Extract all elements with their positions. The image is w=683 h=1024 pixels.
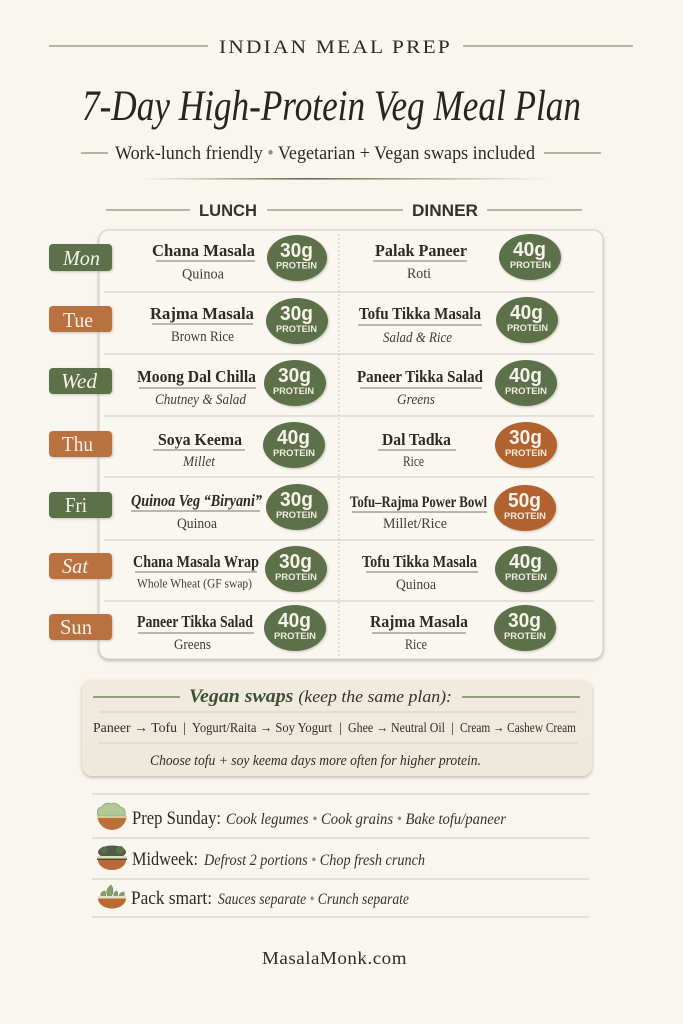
day tag: Wed: Wed [61, 369, 98, 393]
day tag: Thu: Thu [62, 432, 93, 456]
swaps list: | [339, 721, 342, 736]
protein badge: 40g [496, 297, 558, 343]
tip: pack smart: Pack smart: [131, 888, 212, 909]
protein badge: 30g: 30g [508, 610, 541, 632]
vegan swaps heading: Vegan swaps (keep the same plan): [189, 686, 452, 707]
header: Indian Meal Prep: INDIAN MEAL PREP [219, 37, 452, 58]
Wed dinner: Paneer Tikka Salad [357, 367, 483, 386]
Tue dinner: Salad & Rice [383, 330, 452, 346]
protein badge: 40g [495, 360, 557, 406]
subtitle: Work-lunch friendly • Vegetarian + Vegan swaps included [115, 143, 535, 164]
heading: dinner: DINNER [412, 202, 478, 220]
tip: prep Sunday: Cook legumes • Cook grains • Bake tofu/paneer [226, 811, 507, 828]
Wed dinner: Greens [397, 392, 435, 408]
icon: bowl with dark greens [97, 846, 127, 870]
Tue dinner: Tofu Tikka Masala [359, 304, 481, 323]
protein badge: 30g [494, 605, 556, 651]
tip: midweek: Defrost 2 portions • Chop fresh crunch [203, 852, 425, 869]
protein badge: 40g: PROTEIN [510, 260, 551, 270]
swaps list: Ghee → Neutral Oil [348, 721, 445, 736]
swaps list [93, 721, 576, 736]
protein badge: 50g orange: 50g [508, 490, 541, 512]
protein badge: 40g: 40g [509, 365, 542, 387]
Sun lunch: Paneer Tikka Salad [137, 612, 253, 631]
protein badge: 30g: PROTEIN [276, 260, 317, 270]
protein badge: 40g [495, 546, 557, 592]
panel: weekly meal table [49, 230, 603, 659]
Thu dinner [378, 430, 456, 470]
Sun dinner [370, 612, 468, 653]
protein badge: 40g: 40g [510, 302, 543, 324]
Tue dinner [358, 304, 482, 346]
day tag: Mon [49, 244, 112, 271]
protein badge: 30g [264, 360, 326, 406]
Sat lunch: Chana Masala Wrap [133, 552, 259, 571]
protein badge: 30g: PROTEIN [273, 386, 314, 396]
Mon lunch: Quinoa [182, 266, 225, 282]
protein badge: 30g [266, 484, 328, 530]
heading: lunch: LUNCH [199, 202, 257, 220]
protein badge: 30g: 30g [280, 240, 313, 262]
panel: vegan swaps [82, 680, 592, 776]
Fri dinner [350, 494, 488, 532]
protein badge: 30g [267, 235, 327, 281]
icon: bowl with light greens [97, 803, 126, 830]
title: 7-Day High-Protein Veg Meal Plan [82, 83, 581, 130]
column headings [106, 202, 582, 220]
protein badge: 40g: PROTEIN [274, 631, 316, 641]
Fri lunch: Quinoa Veg “Biryani” [131, 491, 262, 510]
day tag: Sun [49, 614, 112, 640]
Thu dinner: Dal Tadka [382, 430, 451, 449]
tip: Choose tofu + soy keema days more often for higher protein. [150, 753, 481, 769]
tip: midweek: Midweek: [132, 849, 198, 870]
Thu lunch: Millet [182, 454, 216, 470]
protein badge: 40g: 40g [278, 610, 311, 632]
protein badge: 40g: PROTEIN [273, 448, 315, 458]
Fri lunch [131, 491, 262, 532]
Sun lunch: Greens [174, 637, 211, 653]
tip: pack smart [131, 888, 409, 909]
protein badge: 30g: 30g [278, 365, 311, 387]
Sat lunch: Whole Wheat (GF swap) [137, 576, 252, 590]
Fri dinner: Millet/Rice [383, 516, 447, 532]
green divider [142, 178, 550, 180]
protein badge: 40g: 40g [509, 551, 542, 573]
protein badge: 30g [266, 298, 328, 344]
swaps list: Yogurt/Raita → Soy Yogurt [192, 721, 332, 736]
day tag: Sat: Sat [62, 554, 89, 578]
Mon lunch [152, 241, 255, 282]
protein badge: 40g [264, 605, 326, 651]
protein badge: 30g: 30g [280, 489, 313, 511]
protein badge: 40g: PROTEIN [507, 323, 548, 333]
protein badge: 30g: PROTEIN [276, 510, 317, 520]
protein badge: 50g orange: PROTEIN [504, 511, 546, 521]
swaps list: | [183, 721, 186, 736]
Thu lunch [153, 430, 245, 470]
protein badge: 40g: 40g [513, 239, 546, 261]
protein badge: 30g orange: PROTEIN [505, 448, 547, 458]
protein badge: 30g orange [495, 422, 557, 468]
Wed dinner [357, 367, 483, 408]
protein badge: 30g: PROTEIN [504, 631, 546, 641]
protein badge: 40g [263, 422, 325, 468]
Wed lunch: Chutney & Salad [155, 392, 247, 408]
Sat dinner [362, 552, 478, 593]
day tag: Thu [49, 431, 112, 457]
Mon dinner [373, 241, 467, 282]
Tue lunch [150, 304, 254, 345]
protein badge: 30g: 30g [279, 551, 312, 573]
protein badge: 30g: PROTEIN [275, 572, 317, 582]
protein badge: 50g orange [494, 485, 556, 531]
day tag: Fri: Fri [65, 493, 87, 517]
Mon lunch: Chana Masala [152, 241, 255, 260]
protein badge: 30g: 30g [280, 303, 313, 325]
Sun dinner: Rajma Masala [370, 612, 468, 631]
protein badge: 40g: PROTEIN [505, 572, 547, 582]
protein badge: 40g: PROTEIN [505, 386, 547, 396]
footer: website: MasalaMonk.com [262, 948, 407, 968]
tip: midweek [132, 849, 425, 870]
Sun lunch [137, 612, 254, 653]
icon: bowl with herbs [98, 885, 126, 908]
Sat lunch [133, 552, 259, 590]
protein badge: 40g: 40g [277, 427, 310, 449]
tip: prep Sunday: Prep Sunday: [132, 808, 221, 829]
tip: prep Sunday [132, 808, 507, 829]
day tag: Tue [49, 306, 112, 332]
tip: pack smart: Sauces separate • Crunch separate [218, 891, 409, 908]
protein badge: 30g orange: 30g [509, 427, 542, 449]
Sat dinner: Tofu Tikka Masala [362, 552, 477, 571]
Thu dinner: Rice [403, 454, 424, 470]
swaps list: Cream → Cashew Cream [460, 721, 576, 736]
day tag: Mon: Mon [62, 246, 100, 270]
swaps list: | [451, 721, 454, 736]
day tag: Wed [49, 368, 112, 394]
protein badge: 40g [499, 234, 561, 280]
Fri dinner: Tofu–Rajma Power Bowl [350, 494, 488, 511]
Sat dinner: Quinoa [396, 577, 437, 593]
Tue lunch: Rajma Masala [150, 304, 254, 323]
Thu lunch: Soya Keema [158, 430, 242, 449]
day tag: Sat [49, 553, 112, 579]
swaps list: Paneer → Tofu [93, 721, 177, 736]
Mon dinner: Palak Paneer [375, 241, 467, 260]
day tag: Tue: Tue [63, 308, 93, 332]
Tue lunch: Brown Rice [171, 329, 234, 345]
day tag: Fri [49, 492, 112, 518]
Sun dinner: Rice [405, 637, 427, 653]
panel: prep tips [92, 794, 589, 917]
Mon dinner: Roti [407, 266, 431, 282]
day tag: Sun: Sun [60, 615, 92, 639]
Wed lunch [137, 367, 256, 408]
Wed lunch: Moong Dal Chilla [137, 367, 256, 386]
protein badge: 30g [265, 546, 327, 592]
protein badge: 30g: PROTEIN [276, 324, 317, 334]
Fri lunch: Quinoa [177, 516, 218, 532]
